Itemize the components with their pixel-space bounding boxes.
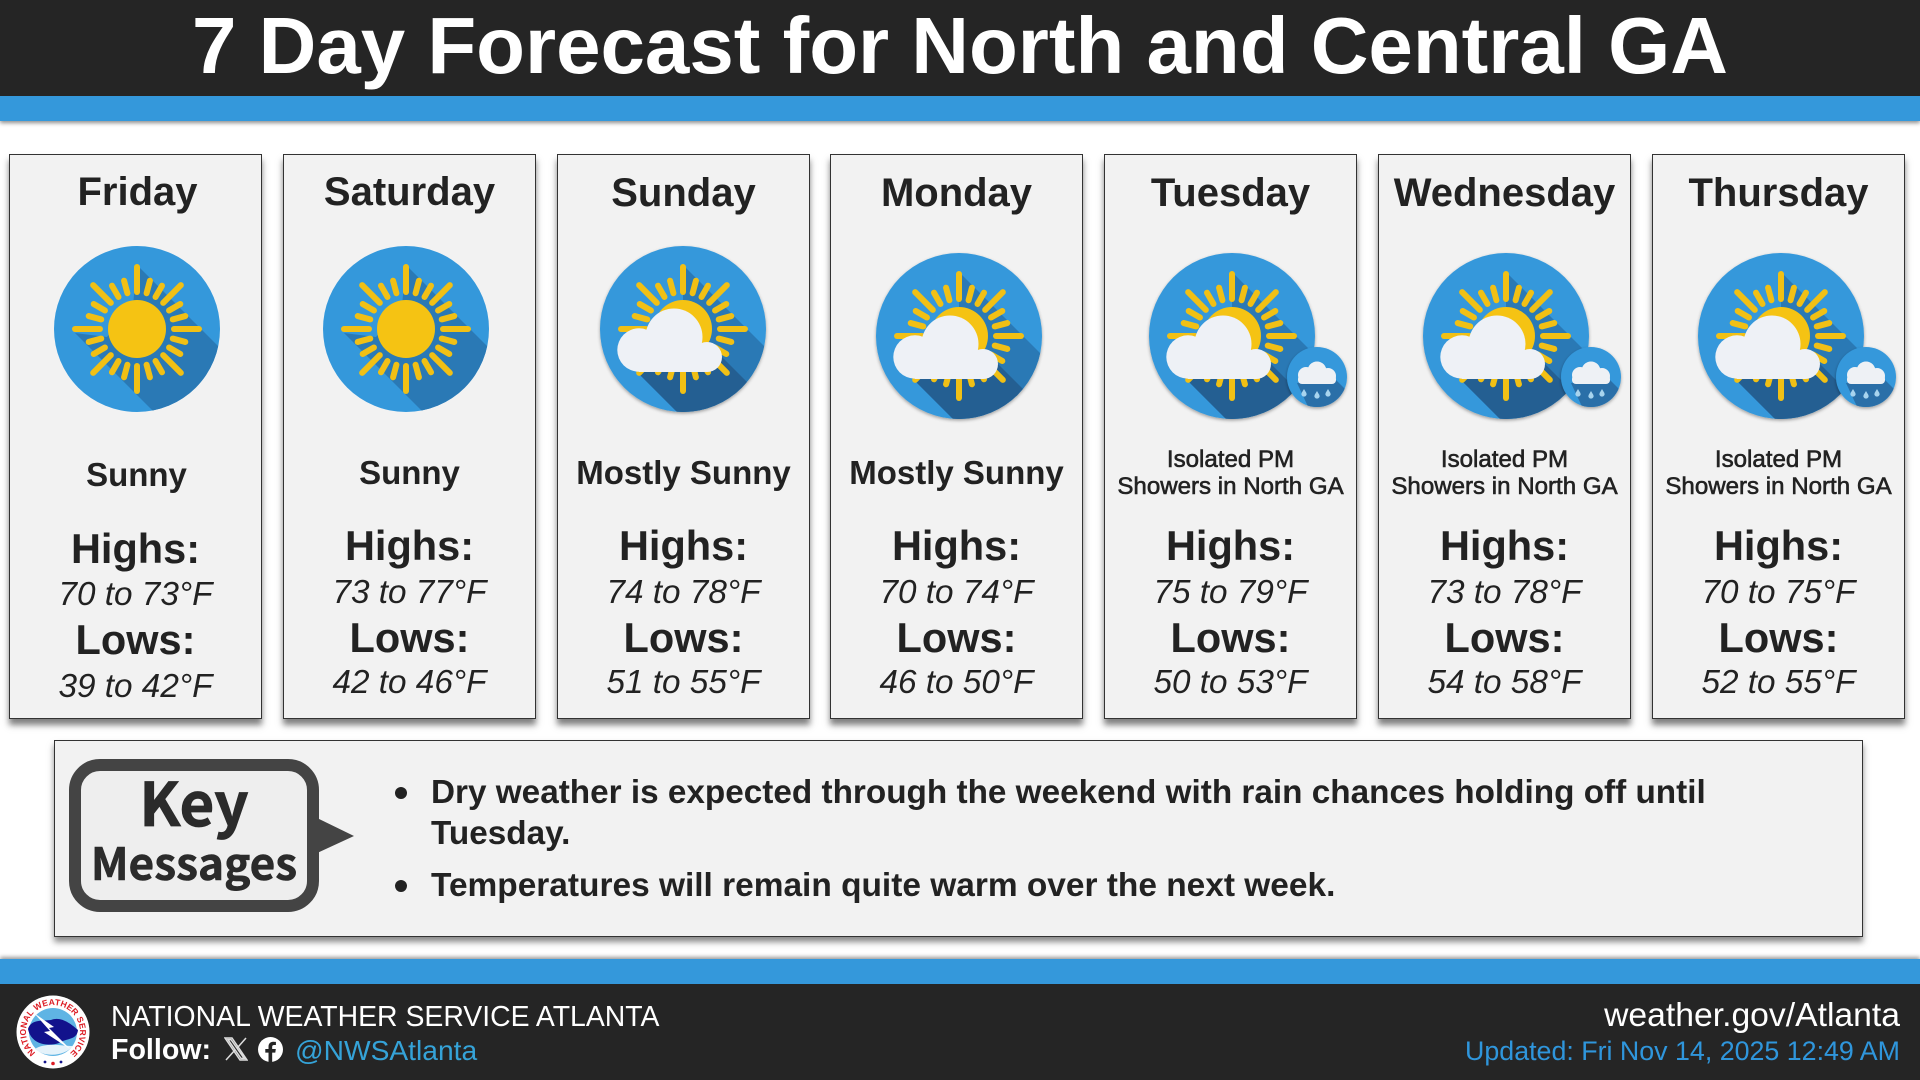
day name: Monday [881,171,1032,215]
day name: Wednesday [1394,171,1615,215]
highs range: 75 to 79°F [1154,574,1308,611]
lows heading: Lows: [1719,614,1838,661]
lows range: 54 to 58°F [1428,664,1582,701]
day name: Friday [77,170,198,214]
icon: sunny [54,246,220,412]
lows heading: Lows: [1171,614,1290,661]
key messages badge: Messages [91,829,297,893]
lows range: 52 to 55°F [1702,664,1856,701]
condition line 1: Isolated PM [1715,446,1842,473]
condition line 2: Showers in North GA [1665,473,1892,500]
bullet 2: Temperatures will remain quite warm over the next week. [431,867,1335,904]
follow label: Follow: [111,1034,211,1066]
panel: Friday [9,154,262,719]
icon: isolated showers [1147,252,1349,422]
bullet 1 [395,774,1706,852]
panel: Tuesday [1104,154,1357,719]
condition: Sunny [359,454,460,491]
NWS logo: NATIONAL WEATHER SERVICE [20,999,86,1058]
panel: Monday [830,154,1083,719]
condition line 2: Showers in North GA [1391,473,1618,500]
highs heading: Highs: [1714,522,1843,569]
social handle: @NWSAtlanta [295,1034,477,1066]
updated timestamp: Updated: Fri Nov 14, 2025 12:49 AM [1465,1036,1900,1066]
icon: mostly sunny [874,252,1044,422]
highs heading: Highs: [1440,522,1569,569]
condition: Sunny [86,456,187,493]
bullet 1: Dry weather is expected through the weekend with rain chances holding off until [431,774,1706,811]
lows heading: Lows: [76,616,195,663]
highs range: 70 to 74°F [880,574,1034,611]
icon: sunny [323,246,489,412]
highs heading: Highs: [619,522,748,569]
footer band [0,959,1920,1080]
panel: Thursday [1652,154,1905,719]
day name: Tuesday [1151,171,1310,215]
condition: Mostly Sunny [576,454,791,491]
panel: Sunday [557,154,810,719]
lows range: 51 to 55°F [606,664,760,701]
panel: Saturday [283,154,536,719]
highs heading: Highs: [1166,522,1295,569]
bullet 1: Tuesday. [431,815,570,852]
header banner [0,0,1920,121]
day name: Thursday [1688,171,1869,215]
condition line 1: Isolated PM [1441,446,1568,473]
highs range: 73 to 78°F [1428,574,1582,611]
office name: NATIONAL WEATHER SERVICE ATLANTA [111,1001,659,1033]
lows range: 46 to 50°F [880,664,1034,701]
panel: key messages [54,740,1863,937]
key messages badge [69,757,354,912]
condition line 2: Showers in North GA [1117,473,1344,500]
icon: isolated showers [1696,252,1898,422]
lows heading: Lows: [897,614,1016,661]
highs range: 70 to 73°F [58,576,212,613]
panel: Wednesday [1378,154,1631,719]
condition line 1: Isolated PM [1167,446,1294,473]
highs range: 74 to 78°F [606,574,760,611]
highs range: 70 to 75°F [1702,574,1856,611]
lows heading: Lows: [350,614,469,661]
highs range: 73 to 77°F [332,574,486,611]
highs heading: Highs: [71,525,200,572]
icon: facebook [258,1037,283,1062]
title: 7 Day Forecast for North and Central GA [192,1,1728,90]
lows heading: Lows: [624,614,743,661]
condition: Mostly Sunny [849,454,1064,491]
website: weather.gov/Atlanta [1604,996,1900,1034]
highs heading: Highs: [892,522,1021,569]
lows range: 50 to 53°F [1154,664,1308,701]
icon: mostly sunny [598,246,768,416]
lows range: 42 to 46°F [332,664,486,701]
icon: isolated showers [1421,252,1623,422]
highs heading: Highs: [345,522,474,569]
day name: Sunday [611,171,756,215]
lows range: 39 to 42°F [58,668,212,705]
day name: Saturday [324,170,495,214]
key messages badge: Key [139,757,249,844]
lows heading: Lows: [1445,614,1564,661]
icon: X [224,1037,248,1061]
